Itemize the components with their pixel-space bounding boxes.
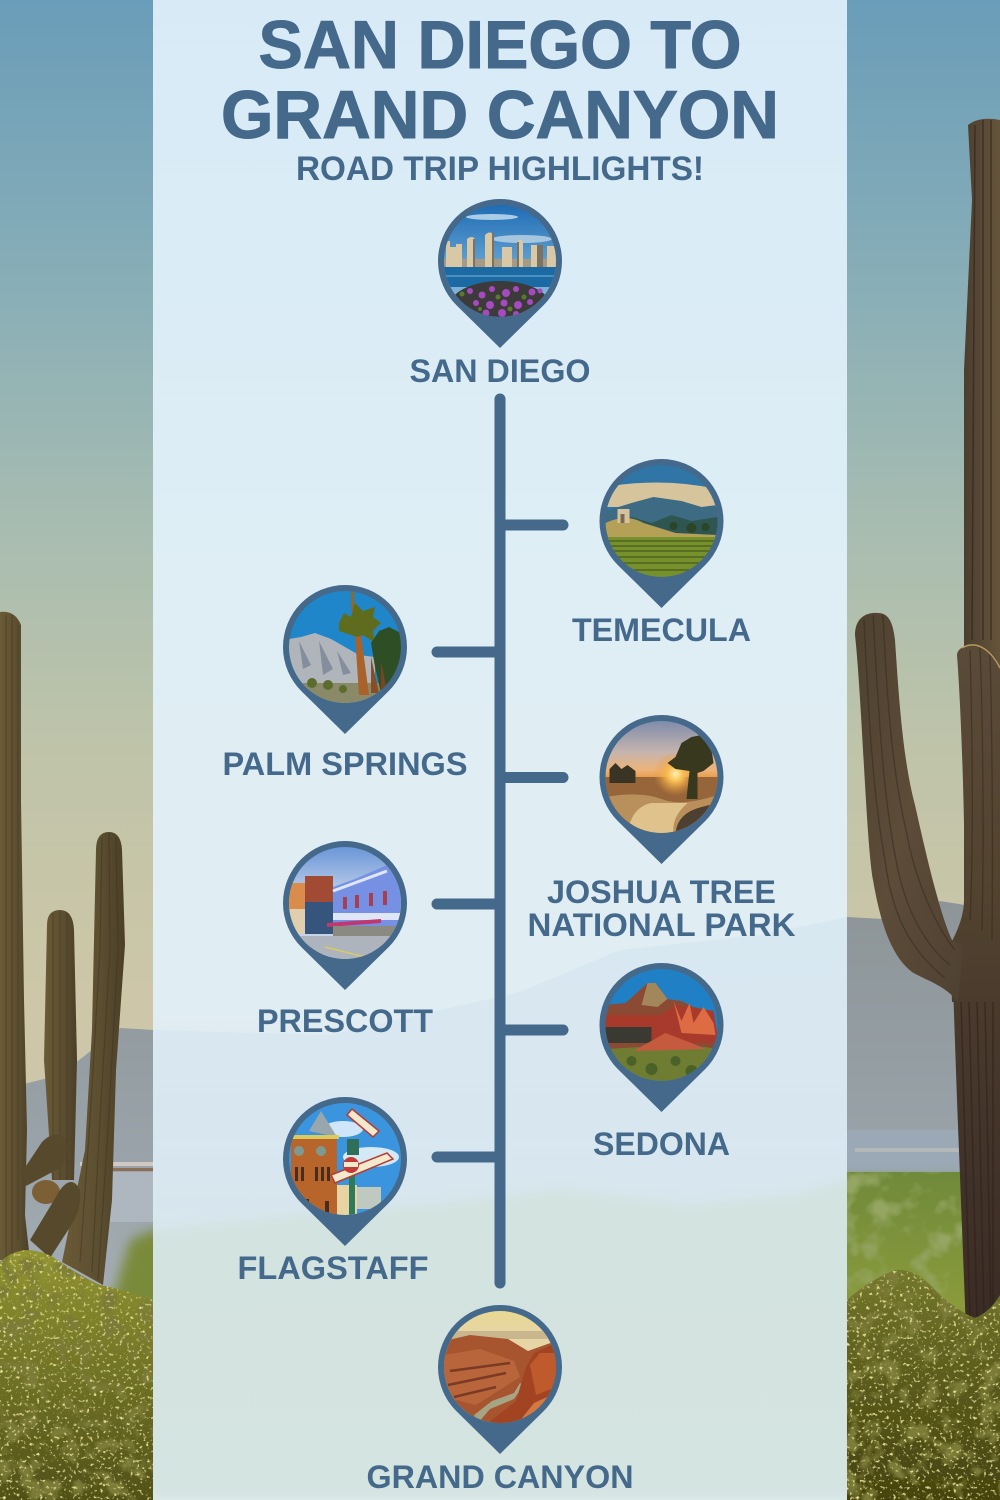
pin: Sedona xyxy=(600,963,724,1112)
town haze xyxy=(80,1130,967,1222)
title: SAN DIEGO TO xyxy=(258,7,742,83)
desert shrubs: left xyxy=(0,1250,153,1500)
desert shrubs: right xyxy=(847,1270,1000,1500)
label: Joshua Tree National Park xyxy=(528,874,796,943)
label: Prescott: PRESCOTT xyxy=(257,1003,433,1039)
pin: Prescott xyxy=(283,841,407,990)
cactus: middle arm xyxy=(44,910,77,1180)
cactus: short stubs xyxy=(22,1134,80,1258)
bushes: bright far layer xyxy=(0,1178,1000,1500)
pin: Flagstaff xyxy=(283,1097,407,1246)
pin: Temecula xyxy=(600,459,724,608)
label: Joshua Tree National Park: JOSHUA TREE xyxy=(547,874,776,910)
title: GRAND CANYON xyxy=(221,77,779,153)
label: Grand Canyon: GRAND CANYON xyxy=(366,1459,634,1495)
pin: Grand Canyon xyxy=(438,1305,562,1454)
subtitle: ROAD TRIP HIGHLIGHTS! xyxy=(296,150,704,188)
cactus: right trunk xyxy=(953,119,1000,1330)
desert shrubs: right far green xyxy=(847,1172,966,1313)
title xyxy=(221,7,779,153)
cactus: right left-arm xyxy=(855,613,964,1002)
cactus: tall arm xyxy=(62,832,125,1285)
label: Joshua Tree National Park: NATIONAL PARK xyxy=(528,907,796,943)
label: San Diego: SAN DIEGO xyxy=(410,353,590,389)
label: Flagstaff: FLAGSTAFF xyxy=(238,1250,428,1286)
pin: Palm Springs xyxy=(283,585,407,734)
label: Palm Springs: PALM SPRINGS xyxy=(222,746,468,782)
cactus: right second arm xyxy=(950,645,1000,1002)
label: Sedona: SEDONA xyxy=(593,1126,730,1162)
distant mountains xyxy=(0,901,965,1330)
label: Temecula: TEMECULA xyxy=(572,612,751,648)
pin: Joshua Tree xyxy=(600,715,724,864)
timeline route xyxy=(437,399,563,1283)
pin: San Diego xyxy=(438,199,562,348)
cactus: left trunk xyxy=(0,612,30,1260)
translucent centre panel xyxy=(153,0,847,1500)
